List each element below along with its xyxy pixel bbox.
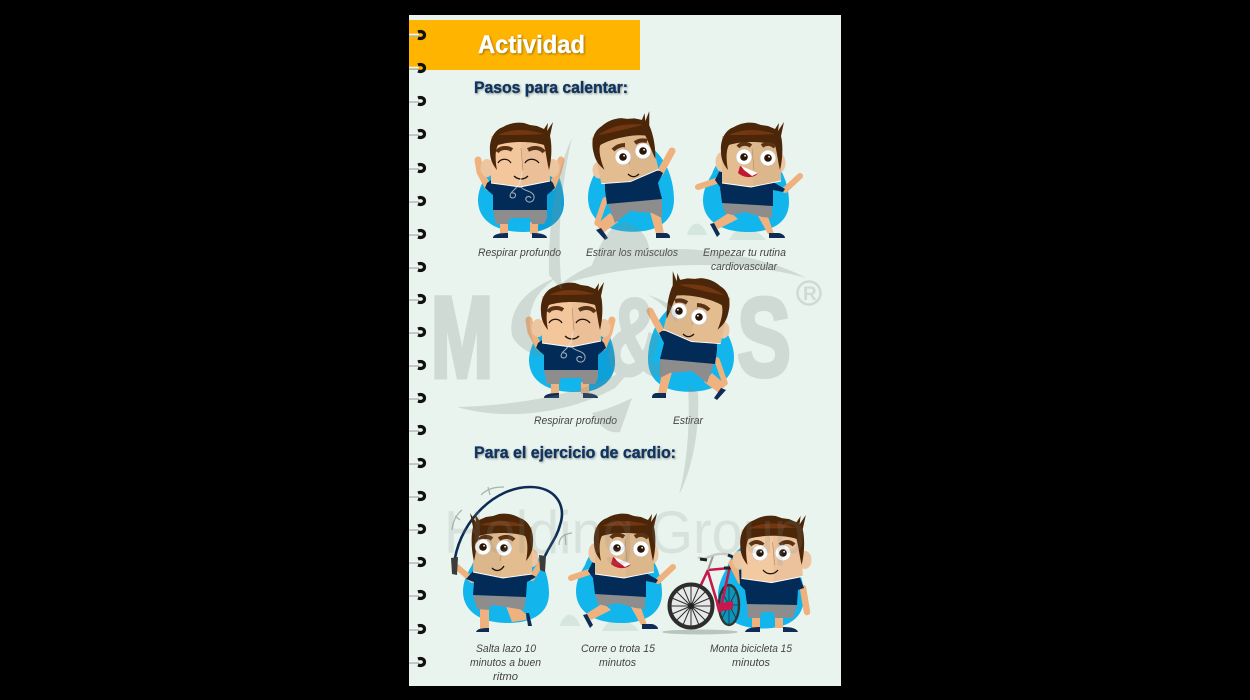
watermark logo: & bbox=[606, 276, 664, 399]
figure: jump rope bbox=[451, 487, 572, 632]
watermark logo: Holding Group bbox=[444, 499, 805, 566]
caption: bicycle: minutos bbox=[732, 657, 770, 669]
figure: breathe deeply second bbox=[529, 282, 615, 398]
caption: stretch muscles: Estirar los músculos bbox=[586, 247, 678, 259]
heading: warm-up: Pasos para calentar: bbox=[474, 78, 628, 97]
title banner bbox=[409, 20, 640, 70]
caption: jump rope: minutos a buen bbox=[470, 657, 541, 669]
caption: stretch: Estirar bbox=[673, 415, 704, 427]
watermark logo: R bbox=[803, 284, 817, 305]
figure: breathe deeply bbox=[478, 122, 564, 238]
figure: stretch muscles bbox=[588, 111, 674, 240]
notebook page bbox=[409, 15, 841, 686]
figure: run or jog bbox=[560, 513, 673, 631]
title banner: Actividad bbox=[478, 31, 585, 59]
figure: stretch mirrored bbox=[648, 271, 734, 400]
caption: run: minutos bbox=[599, 657, 636, 669]
caption: breathe: Respirar profundo bbox=[478, 247, 561, 259]
caption: start routine: cardiovascular bbox=[711, 261, 778, 273]
figure: start cardio routine bbox=[687, 122, 800, 240]
caption: bicycle: Monta bicicleta 15 bbox=[710, 643, 793, 655]
figure: ride bicycle bbox=[662, 515, 812, 634]
watermark logo: M bbox=[431, 274, 493, 402]
watermark logo: S bbox=[737, 275, 791, 400]
heading: cardio: Para el ejercicio de cardio: bbox=[474, 443, 676, 462]
caption: jump rope: Salta lazo 10 bbox=[476, 643, 537, 655]
caption: breathe second: Respirar profundo bbox=[534, 415, 617, 427]
caption: run: Corre o trota 15 bbox=[581, 643, 656, 655]
watermark logo bbox=[431, 138, 820, 566]
caption: jump rope: ritmo bbox=[493, 671, 518, 683]
spiral binding bbox=[409, 32, 424, 665]
caption: start routine: Empezar tu rutina bbox=[703, 247, 786, 259]
